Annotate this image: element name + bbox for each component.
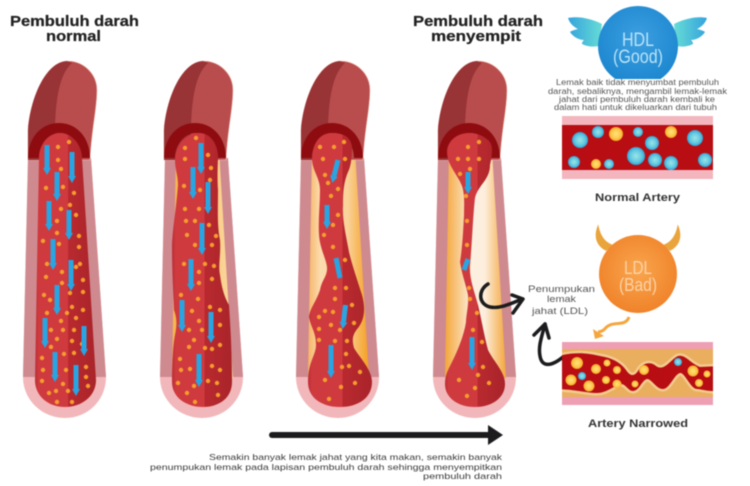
text: LDL buildup label: lemak xyxy=(547,294,577,304)
blood cells xyxy=(40,140,90,404)
HDL label: HDL xyxy=(622,30,654,51)
text: LDL buildup label: jahat (LDL) xyxy=(531,306,588,316)
blood flow arrows xyxy=(182,143,211,380)
title: pembuluh darah menyempit xyxy=(413,13,543,45)
text: progression caption: penumpukan lemak pada lapisan pembuluh darah sehingga menyempitkan xyxy=(150,462,502,472)
diagram: narrowed artery xyxy=(552,342,723,405)
HDL label xyxy=(613,30,663,68)
icon: LDL devil ball xyxy=(593,227,680,339)
blood cells xyxy=(317,140,362,401)
LDL label: (Bad) xyxy=(619,275,657,295)
vessel 2: early plaque xyxy=(160,61,243,418)
text: LDL buildup label xyxy=(528,284,595,316)
text: HDL description: darah, sebaliknya, mengambil lemak-lemak xyxy=(548,87,728,96)
horns xyxy=(596,227,680,250)
tail xyxy=(598,317,629,332)
arrow: artery to label xyxy=(534,324,563,364)
label: artery narrowed: Artery Narrowed xyxy=(588,418,688,430)
text: HDL description: dalam hati untuk dikeluarkan dari tubuh xyxy=(554,103,717,112)
text: progression caption: pembuluh darah xyxy=(423,471,502,481)
left wing xyxy=(568,17,602,47)
HDL label: (Good) xyxy=(613,47,663,68)
diagram: normal artery xyxy=(562,116,713,179)
vessel 3: thick plaque xyxy=(296,61,379,418)
LDL label xyxy=(619,258,657,295)
blood flow arrows xyxy=(327,160,346,371)
arrow: progression xyxy=(272,425,503,445)
right wing xyxy=(674,17,707,47)
ball xyxy=(599,235,677,313)
text: progression caption: Semakin banyak lemak jahat yang kita makan, semakin banyak xyxy=(209,452,503,462)
title: pembuluh darah normal xyxy=(10,13,139,45)
icon: HDL winged ball xyxy=(568,6,707,86)
text: progression caption xyxy=(150,452,503,481)
label: normal artery: Normal Artery xyxy=(595,192,681,204)
text: LDL buildup label: Penumpukan xyxy=(528,284,595,294)
arrow: vessel to label xyxy=(481,284,523,313)
LDL label: LDL xyxy=(624,258,652,278)
vessel 1: normal xyxy=(23,61,106,418)
title: pembuluh darah normal: Pembuluh darah xyxy=(10,13,139,30)
blood flow arrows xyxy=(464,172,472,363)
title: pembuluh darah normal: normal xyxy=(46,28,101,45)
title: pembuluh darah menyempit: Pembuluh darah xyxy=(413,13,543,30)
blood cells xyxy=(176,136,222,404)
title: pembuluh darah menyempit: menyempit xyxy=(431,28,521,45)
blood flow arrows xyxy=(45,145,84,389)
blood cells xyxy=(456,140,491,398)
text: HDL description xyxy=(548,78,728,112)
ball xyxy=(598,6,678,86)
vessel 4: narrowed xyxy=(433,61,516,418)
text: HDL description: Lemak baik tidak menyumbat pembuluh xyxy=(556,78,719,87)
text: HDL description: jahat dari pembuluh darah kembali ke xyxy=(558,95,716,104)
